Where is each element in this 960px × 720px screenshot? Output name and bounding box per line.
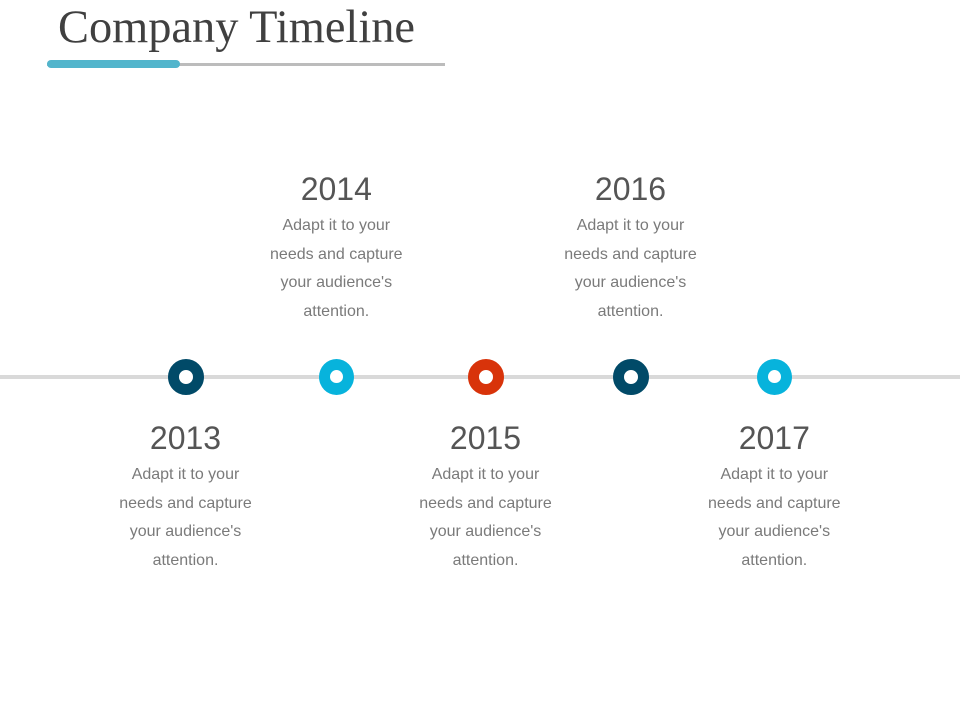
milestone: 2013 xyxy=(119,420,252,569)
milestone: 2017: needs and capture xyxy=(708,495,841,512)
milestone: 2014: attention. xyxy=(303,303,369,320)
milestone: 2017: 2017 xyxy=(739,420,810,456)
milestone: 2015 xyxy=(419,420,552,569)
title: Company Timeline xyxy=(58,2,415,53)
milestone: 2015: your audience's xyxy=(430,523,541,540)
milestone: 2014: 2014 xyxy=(301,171,372,207)
milestone: 2017: your audience's xyxy=(718,523,830,540)
milestone: 2013: needs and capture xyxy=(119,495,252,512)
milestone: 2016: 2016 xyxy=(595,171,666,207)
marker: 2015 xyxy=(468,359,504,395)
milestone: 2013: Adapt it to your xyxy=(132,466,239,483)
milestone: 2017: attention. xyxy=(741,552,807,569)
milestone: 2015: 2015 xyxy=(450,420,521,456)
milestone: 2016: Adapt it to your xyxy=(577,217,684,234)
milestone: 2016: needs and capture xyxy=(564,246,697,263)
milestone: 2014: needs and capture xyxy=(270,246,403,263)
milestone: 2015: needs and capture xyxy=(419,495,552,512)
milestone: 2013: your audience's xyxy=(130,523,241,540)
milestone: 2014 xyxy=(270,171,403,320)
milestone: 2014: your audience's xyxy=(280,274,392,291)
milestone: 2013: 2013 xyxy=(150,420,221,456)
milestone: 2013: attention. xyxy=(153,552,218,569)
milestone: 2015: attention. xyxy=(453,552,518,569)
title underline xyxy=(47,60,445,68)
milestone: 2016: attention. xyxy=(598,303,663,320)
milestone: 2017: Adapt it to your xyxy=(720,466,828,483)
marker: 2013 xyxy=(168,359,204,395)
marker: 2016 xyxy=(613,359,649,395)
marker: 2017 xyxy=(757,359,792,395)
milestone: 2016 xyxy=(564,171,697,320)
milestone: 2016: your audience's xyxy=(575,274,686,291)
timeline axis xyxy=(0,375,960,379)
milestone: 2014: Adapt it to your xyxy=(282,217,390,234)
marker: 2014 xyxy=(319,359,354,395)
milestone: 2015: Adapt it to your xyxy=(432,466,539,483)
milestone: 2017 xyxy=(708,420,841,569)
